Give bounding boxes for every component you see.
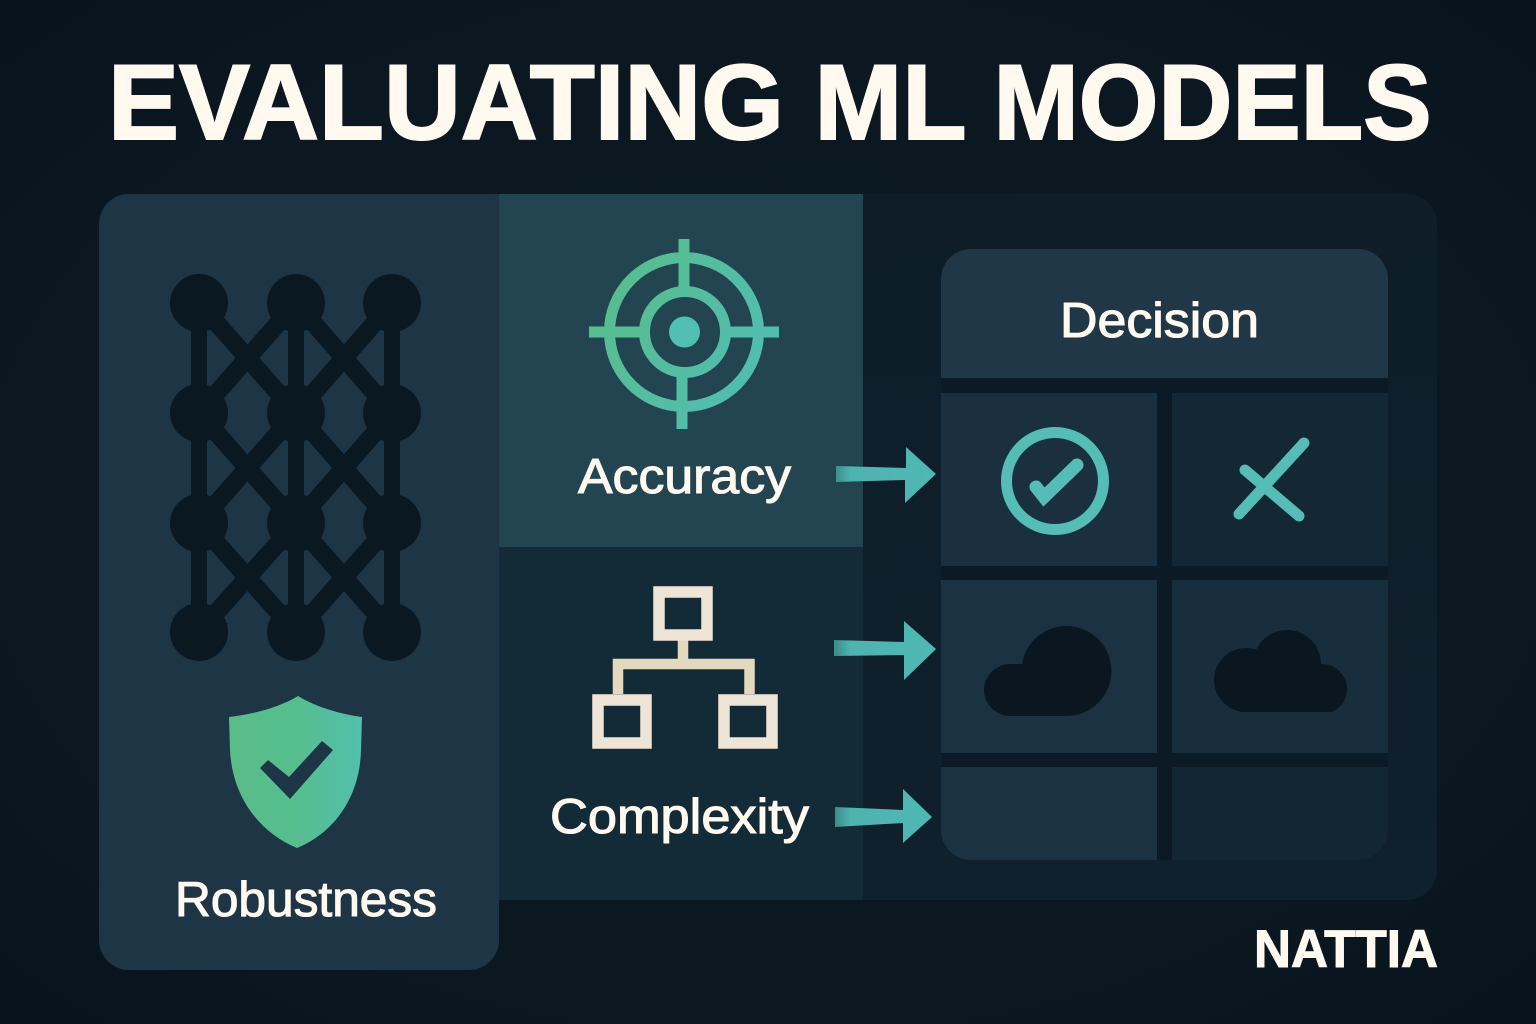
title [108,42,1432,162]
panel: accuracy [499,194,863,547]
cell: cloud right [1172,580,1388,753]
title: ML [814,42,966,162]
decision header [941,249,1388,378]
brand name: NATTIA [1254,920,1438,979]
icon: small cloud [1214,630,1347,714]
icon: cross [1239,443,1304,516]
panel: decision backdrop [840,194,1437,900]
arrow: complexity to lower row [835,789,932,843]
decision matrix [941,249,1388,860]
decision label: Decision [1060,294,1259,348]
complexity label: Complexity [550,790,810,844]
cell: empty right [1172,767,1388,860]
title: EVALUATING [108,42,784,162]
accuracy label: Accuracy [578,450,792,504]
robustness panel background [99,194,499,970]
accuracy panel background [499,194,863,547]
reject cell background [1172,393,1388,566]
icon: hierarchy [598,592,772,743]
icon: large cloud [984,626,1111,716]
cell: cloud left [941,580,1157,753]
cloud right cell background [1172,580,1388,753]
complexity panel background [499,547,863,900]
panel: complexity [499,547,863,900]
arrow: accuracy to decision [836,447,936,503]
cell: reject [1172,393,1388,566]
arrow: complexity to decision [834,621,936,680]
robustness label: Robustness [175,873,437,927]
panel: robustness [99,194,499,970]
icon: check circle [1006,432,1104,530]
approve cell background [941,393,1157,566]
cell: empty left [941,767,1157,860]
matrix backing [941,249,1388,860]
header background [941,249,1388,378]
cell: approve [941,393,1157,566]
icon: neural network [170,274,421,661]
icon: shield with check [229,696,362,848]
cloud left cell background [941,580,1157,753]
icon: target [589,239,779,429]
title: MODELS [994,42,1432,162]
